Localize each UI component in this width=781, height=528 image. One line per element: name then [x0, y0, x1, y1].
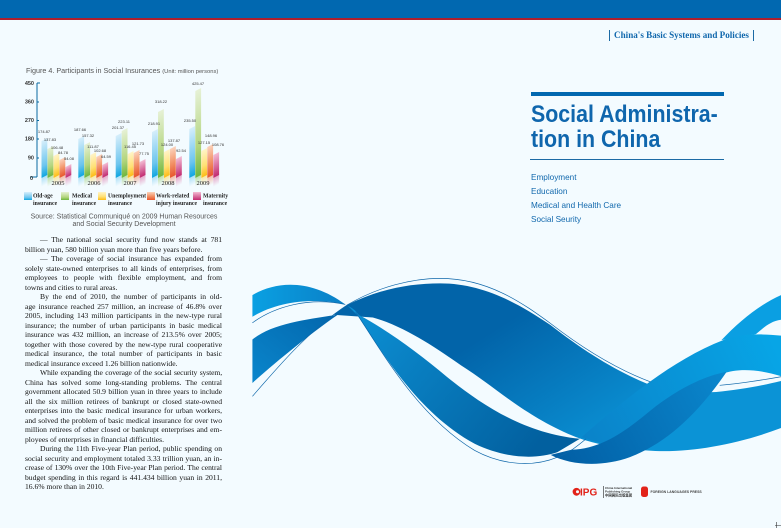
legend: medical insurance: Medical: [72, 194, 92, 200]
list item: medical: Medical and Health Care: [531, 200, 621, 210]
body text: medical insurance, the total number of participants in basic: [25, 349, 222, 358]
legend: work-related injury insurance: injury insurance: [156, 201, 197, 207]
logo: CIPG: IPG: [580, 487, 597, 498]
ribbon: dark swoosh: [551, 372, 727, 464]
legend: maternity insurance: [193, 192, 228, 207]
ribbon graphic: [252, 278, 781, 464]
legend: medical insurance: [61, 192, 97, 207]
legend: medical insurance: insurance: [72, 201, 97, 207]
year labels: 2007: [124, 180, 137, 187]
ribbon: lower left band: [348, 306, 580, 457]
bars 2009: [189, 88, 219, 187]
body text: all the six million retirees of bankrupt or closed state-owned: [25, 396, 222, 406]
legend: old-age insurance: Old-age: [33, 194, 53, 200]
year labels: 2006: [88, 180, 101, 187]
value labels: 218.91: [148, 121, 161, 126]
logo: CIPG: Publishing Group: [605, 490, 630, 494]
value labels: 223.11: [118, 119, 131, 124]
publisher logos: [573, 486, 702, 498]
ribbon: main wide band: [333, 283, 781, 451]
value labels: 124.00: [161, 142, 174, 147]
chart source note: and Social Security Development: [72, 221, 176, 228]
body text: [25, 235, 222, 491]
top banner: [0, 0, 781, 20]
title text: [531, 100, 718, 153]
value labels: 108.76: [212, 142, 225, 147]
body text: crease of 130% over the 10th Five-year Plan period. The central: [25, 463, 222, 472]
value labels: 106.48: [51, 145, 64, 150]
logo: CIPG: 中国国际出版集团: [605, 492, 633, 498]
contents list: [531, 172, 621, 224]
value labels: 102.68: [94, 148, 107, 153]
ribbon: left lower band: [252, 311, 344, 383]
value labels: 111.87: [87, 144, 100, 149]
body text: billion yuan, 580 billion yuan more than five years before.: [25, 244, 202, 254]
value labels: 137.87: [168, 138, 181, 143]
body text: age insurance reached 257 million, an increase of 46.8% over: [25, 302, 222, 310]
value labels: 157.32: [82, 133, 95, 138]
legend: old-age insurance: insurance: [33, 201, 58, 207]
title top bar: [531, 92, 724, 96]
year labels: 2005: [52, 180, 64, 187]
ribbon: top left light band: [252, 285, 345, 317]
legend: unemployment insurance: [98, 192, 146, 207]
title block: [530, 92, 724, 160]
bars: [42, 88, 219, 187]
value labels: 64.59: [101, 154, 112, 159]
title text: Social Administra-: [531, 100, 718, 128]
body text: budget spending in this regard is 441.434 billion yuan in 2011,: [25, 472, 222, 482]
year labels: 2008: [162, 180, 174, 187]
bars 2005: [42, 138, 71, 187]
body text: ployees of enterprises in financial difficulties.: [25, 434, 164, 444]
y axis: 270: [25, 118, 34, 124]
year labels: 2009: [196, 180, 210, 187]
body text: social security and employment totaled 3.33 trillion yuan, an in-: [25, 454, 222, 462]
legend: unemployment insurance: Unemployment: [108, 194, 146, 200]
value labels: 137.83: [44, 137, 57, 142]
logo: Foreign Languages Press: FOREIGN LANGUAGES PRESS: [650, 490, 702, 494]
legend: [24, 192, 228, 207]
body text: together with those covered by the new-type rural cooperative: [25, 340, 222, 348]
body text: By the end of 2010, the number of participants in old-: [40, 292, 222, 301]
title text: tion in China: [531, 126, 660, 153]
value labels: 77.75: [139, 151, 150, 156]
body text: towns and cities to rural areas.: [25, 282, 117, 292]
legend: work-related injury insurance: [147, 192, 197, 207]
body text: insurance was 432 million, an increase of 213.5% over 2005;: [25, 330, 222, 339]
body text: million retirees of other closed or bankrupt enterprises and em-: [25, 425, 222, 434]
legend: maternity insurance: Maternity: [203, 194, 228, 200]
bars 2007: [116, 128, 146, 187]
legend: old-age insurance: [24, 192, 58, 207]
ribbon: thin outline strokes: [252, 278, 781, 463]
chart source note: [31, 214, 218, 228]
value labels: 84.78: [58, 150, 69, 155]
value labels: 127.15: [198, 140, 211, 145]
title bottom rule: [530, 159, 724, 160]
value labels: 92.54: [176, 148, 187, 153]
legend: unemployment insurance: insurance: [108, 201, 133, 207]
ribbon: upper right band: [721, 294, 781, 340]
value labels: [38, 81, 225, 161]
chart source note: Source: Statistical Communiqué on 2009 Human Resources: [31, 214, 218, 220]
list item: education: Education: [531, 186, 567, 196]
list item: employment: Employment: [531, 172, 577, 182]
body text: insurance; the number of urban participants in basic medical: [25, 320, 222, 330]
logo: CIPG: [573, 486, 633, 498]
body text: 2005, including 143 million participants in the new-type rural: [25, 311, 222, 320]
body text: 16.6% more than in 2010.: [25, 482, 104, 491]
legend: maternity insurance: insurance: [203, 201, 228, 207]
value labels: 121.73: [132, 141, 145, 146]
body text: solely state-owned enterprises to all kinds of enterprises, from: [25, 264, 222, 272]
body text: medical insurance exceed 1.26 billion nationwide.: [25, 358, 177, 368]
body text: enterprises into the basic medical insurance for urban workers,: [25, 406, 222, 415]
y axis: 0: [30, 176, 33, 182]
value labels: 318.22: [155, 99, 168, 104]
value labels: 187.66: [74, 127, 87, 132]
logo: CIPG: China International: [605, 486, 632, 490]
value labels: 54.08: [64, 156, 75, 161]
ribbon: crossing light band: [582, 334, 781, 446]
y axis: 180: [25, 136, 34, 142]
legend: work-related injury insurance: Work-related: [156, 194, 190, 200]
body text: — The national social security fund now stands at 781: [40, 235, 222, 244]
value labels: 201.37: [112, 125, 125, 130]
value labels: 235.50: [184, 118, 197, 123]
body text: employees to people with flexible employment, and from: [25, 273, 222, 282]
body text: While expanding the coverage of the social security system,: [40, 368, 222, 377]
y axis: 450: [25, 81, 34, 87]
body text: During the 11th Five-year Plan period, public spending on: [40, 444, 222, 453]
series header: China's Basic Systems and Policies: [614, 30, 749, 40]
body text: government allocated 50.9 billion yuan in three years to include: [25, 387, 222, 396]
bars 2008: [152, 109, 182, 187]
list item: social security: Social Seurity: [531, 214, 581, 224]
value labels: 174.87: [38, 129, 51, 134]
body text: and solved the problem of basic medical insurance for over two: [25, 416, 222, 424]
value labels: 425.47: [192, 81, 205, 86]
y axis: [25, 81, 40, 182]
y axis: 90: [28, 156, 34, 162]
body text: — The coverage of social insurance has expanded from: [40, 254, 222, 263]
year labels: [52, 180, 210, 187]
bars 2006: [78, 136, 108, 187]
body text: China has solved some long-standing problems. The central: [25, 378, 222, 386]
value labels: 148.96: [205, 133, 218, 138]
value labels: 116.45: [124, 144, 137, 149]
y axis: 360: [25, 100, 34, 106]
chart heading: Figure 4. Participants in Social Insurances (Unit: million persons): [26, 66, 218, 75]
